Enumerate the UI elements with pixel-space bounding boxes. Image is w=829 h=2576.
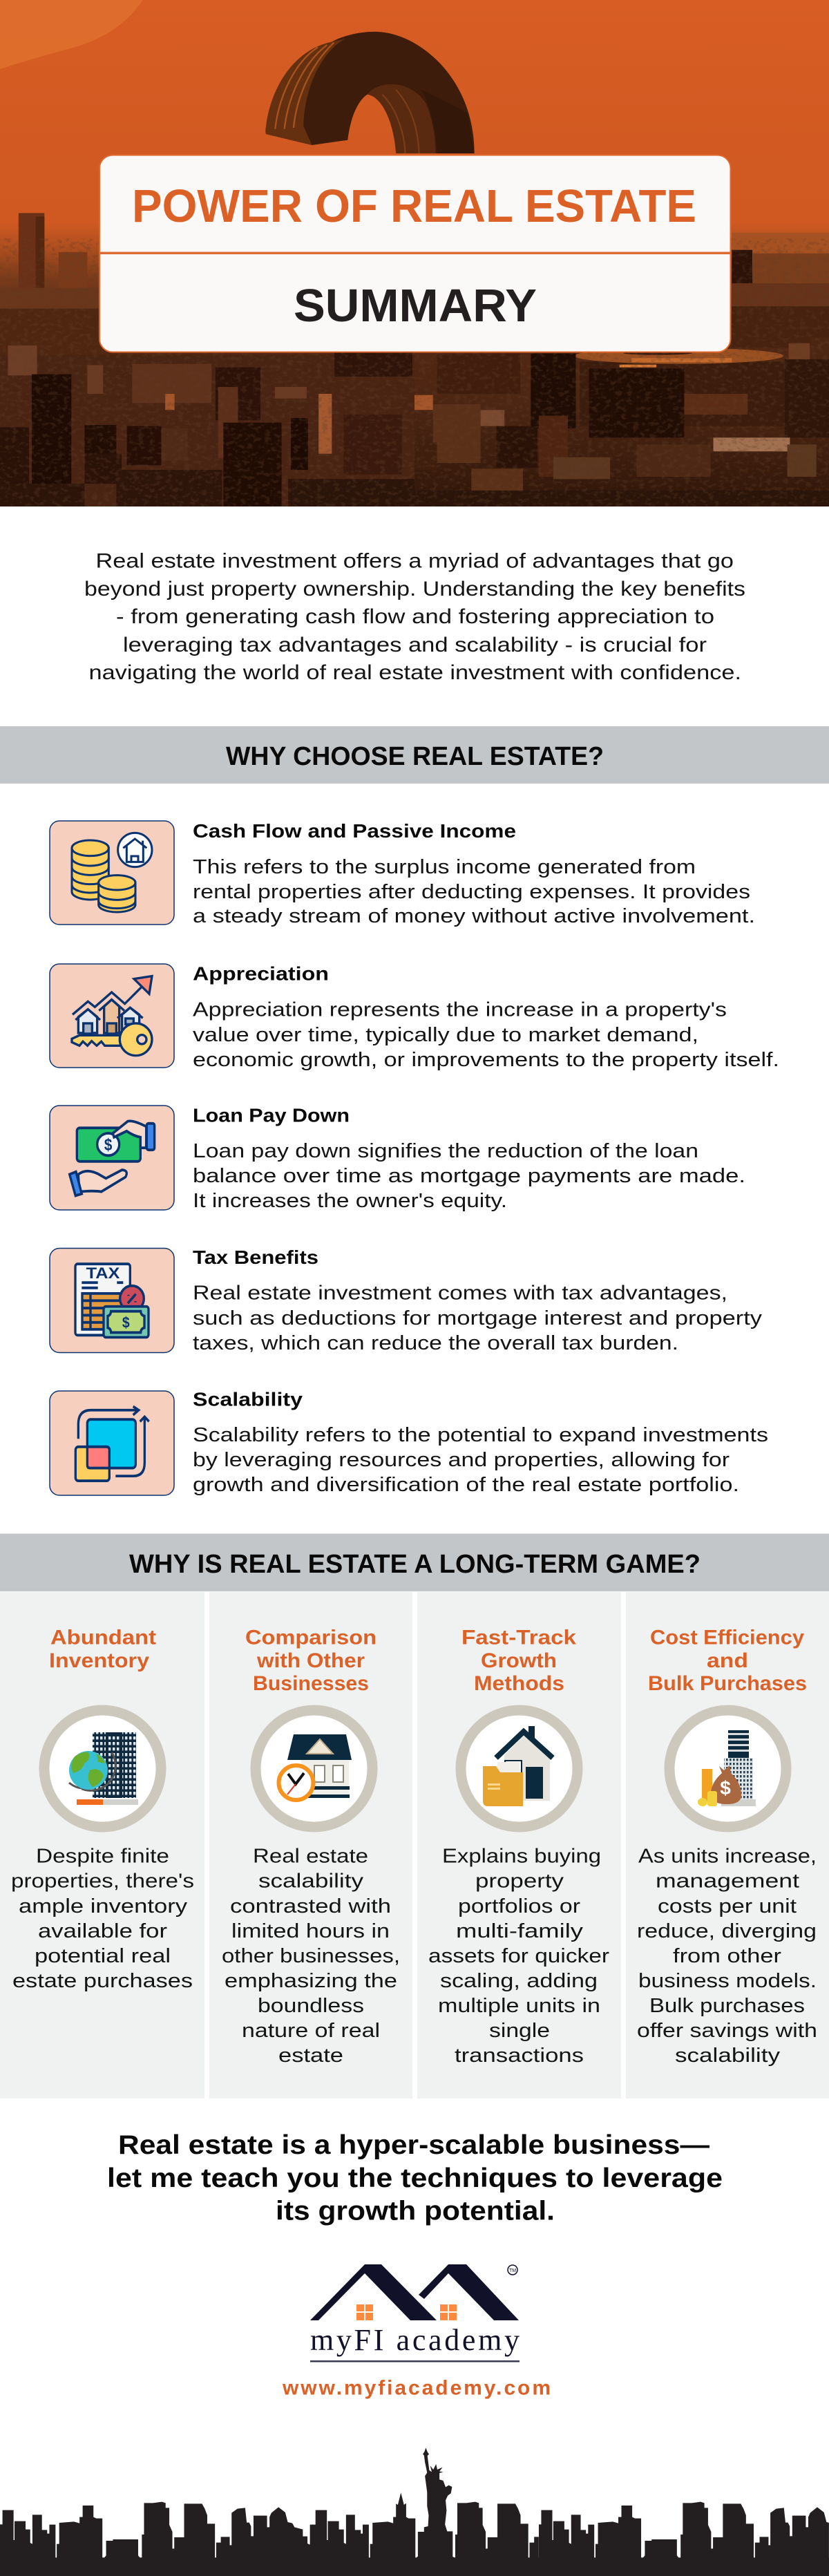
closing statement	[107, 2130, 723, 2226]
description: multiple units in	[438, 1995, 600, 2017]
description	[193, 856, 755, 927]
description	[193, 999, 779, 1071]
icon: scaling squares with arrows	[50, 1391, 174, 1495]
subtitle: summary: SUMMARY	[294, 280, 537, 332]
description: ample inventory	[19, 1895, 188, 1917]
description: transactions	[455, 2045, 584, 2067]
description: contrasted with	[230, 1895, 391, 1917]
heading: Scalability	[193, 1389, 303, 1410]
icon: house and clock	[256, 1710, 372, 1827]
intro paragraph: Real estate investment offers a myriad of advantages that go	[95, 550, 734, 572]
icon: coin stacks and house	[50, 821, 174, 925]
description	[193, 1140, 745, 1212]
icon: money bag and tower	[669, 1710, 786, 1827]
heading	[245, 1627, 377, 1695]
description: estate purchases	[12, 1970, 193, 1992]
heading: Cost Efficiency	[650, 1627, 804, 1649]
description: Real estate investment comes with tax advantages,	[193, 1282, 727, 1305]
intro paragraph: beyond just property ownership. Understanding the key benefits	[84, 578, 745, 600]
title card	[99, 155, 731, 352]
heading	[461, 1627, 576, 1695]
description: value over time, typically due to market demand,	[193, 1024, 698, 1046]
title: power of real estate: POWER OF REAL ESTATE	[132, 180, 696, 232]
description: boundless	[258, 1995, 364, 2017]
description: other businesses,	[222, 1945, 400, 1967]
column: abundant inventory	[0, 1592, 204, 2099]
panel: loan pay down	[50, 1104, 745, 1212]
icon: tax form and money	[50, 1248, 174, 1353]
description: portfolios or	[458, 1895, 580, 1917]
heading: and	[707, 1649, 748, 1672]
description	[428, 1845, 609, 2067]
description: rental properties after deducting expenses. It provides	[193, 881, 750, 903]
column: fast-track growth methods	[417, 1592, 621, 2099]
description: growth and diversification of the real estate portfolio.	[193, 1474, 739, 1496]
heading: Methods	[474, 1672, 564, 1695]
heading	[648, 1627, 807, 1695]
heading: Businesses	[253, 1672, 369, 1695]
description	[193, 1282, 763, 1354]
description: by leveraging resources and properties, allowing for	[193, 1449, 730, 1471]
intro paragraph: navigating the world of real estate investment with confidence.	[88, 661, 741, 684]
description: taxes, which can reduce the overall tax burden.	[193, 1332, 678, 1354]
description: As units increase,	[638, 1845, 817, 1867]
icon: houses, key and rising arrow	[50, 964, 174, 1068]
heading: Tax Benefits	[193, 1247, 318, 1268]
description: potential real	[35, 1945, 171, 1967]
description: Appreciation represents the increase in a property's	[193, 999, 727, 1021]
section header: why choose real estate	[0, 726, 829, 784]
description: properties, there's	[11, 1870, 194, 1892]
icon: globe and tower	[44, 1710, 161, 1827]
icon: hands exchanging money	[50, 1106, 174, 1210]
icon: money bag and tower: $	[720, 1777, 731, 1799]
heading: Bulk Purchases	[648, 1672, 807, 1695]
description: reduce, diverging	[637, 1920, 817, 1942]
description	[11, 1845, 194, 1992]
icon: tax form and money: TAX	[86, 1265, 120, 1282]
description: Real estate	[253, 1845, 368, 1867]
description: from other	[673, 1945, 781, 1967]
heading: Cash Flow and Passive Income	[193, 820, 516, 842]
description	[637, 1845, 817, 2067]
closing statement: let me teach you the techniques to leverage	[107, 2163, 723, 2193]
skyline with statue of liberty	[0, 2447, 829, 2576]
description: Loan pay down signifies the reduction of the loan	[193, 1140, 698, 1162]
description: management	[656, 1870, 799, 1892]
panel: scalability	[50, 1389, 768, 1496]
section header: why choose real estate: WHY CHOOSE REAL ESTATE?	[226, 742, 604, 771]
description: scalability	[258, 1870, 364, 1892]
description	[193, 1424, 768, 1496]
description	[222, 1845, 400, 2067]
description: single	[489, 2020, 550, 2042]
description: Explains buying	[442, 1845, 601, 1867]
icon: tax form and money: $	[122, 1314, 130, 1332]
icon: house and folder	[461, 1710, 578, 1827]
description: balance over time as mortgage payments are made.	[193, 1165, 745, 1187]
column: comparison with other businesses	[209, 1592, 412, 2099]
column: cost efficiency and bulk purchases	[626, 1592, 829, 2099]
section header: long-term game: WHY IS REAL ESTATE A LONG-TERM GAME?	[129, 1550, 701, 1579]
description: property	[475, 1870, 564, 1892]
icon: hands exchanging money: $	[104, 1135, 113, 1154]
closing statement: Real estate is a hyper-scalable business—	[118, 2130, 709, 2160]
heading	[49, 1627, 156, 1672]
description: limited hours in	[231, 1920, 390, 1942]
description: This refers to the surplus income generated from	[193, 856, 696, 878]
website url: www.myfiacademy.com	[282, 2377, 551, 2399]
heading: Abundant	[50, 1627, 156, 1649]
intro paragraph: - from generating cash flow and fostering appreciation to	[116, 605, 714, 628]
description: Scalability refers to the potential to expand investments	[193, 1424, 768, 1446]
intro paragraph	[84, 550, 745, 684]
heading: Growth	[481, 1649, 557, 1672]
closing statement: its growth potential.	[276, 2196, 555, 2226]
description: scaling, adding	[440, 1970, 598, 1992]
description: a steady stream of money without active involvement.	[193, 905, 755, 927]
description: such as deductions for mortgage interest and property	[193, 1307, 763, 1329]
heading: Inventory	[49, 1649, 149, 1672]
heading: Loan Pay Down	[193, 1104, 350, 1126]
logo: myFI academy: myFI academy	[310, 2323, 520, 2357]
heading: with Other	[256, 1649, 365, 1672]
description: offer savings with	[637, 2020, 817, 2042]
heading: Fast-Track	[461, 1627, 576, 1649]
logo: myFI academy: TM	[509, 2269, 516, 2273]
description: nature of real	[242, 2020, 380, 2042]
description: multi-family	[456, 1920, 584, 1942]
panel: appreciation	[50, 963, 779, 1071]
logo: myFI academy	[310, 2264, 520, 2362]
description: assets for quicker	[428, 1945, 609, 1967]
description: Bulk purchases	[649, 1995, 805, 2017]
description: Despite finite	[36, 1845, 169, 1867]
panel: cash flow and passive income	[50, 820, 755, 927]
heading: Comparison	[245, 1627, 377, 1649]
description: costs per unit	[658, 1895, 797, 1917]
description: scalability	[675, 2045, 781, 2067]
hero banner	[0, 0, 829, 506]
description: available for	[38, 1920, 167, 1942]
panel: tax benefits	[50, 1247, 763, 1354]
section header: long-term game	[0, 1534, 829, 1591]
description: emphasizing the	[225, 1970, 397, 1992]
description: business models.	[638, 1970, 817, 1992]
intro paragraph: leveraging tax advantages and scalability - is crucial for	[123, 634, 707, 656]
heading: Appreciation	[193, 963, 329, 984]
description: economic growth, or improvements to the property itself.	[193, 1049, 779, 1071]
description: estate	[278, 2045, 343, 2067]
description: It increases the owner's equity.	[193, 1190, 507, 1212]
